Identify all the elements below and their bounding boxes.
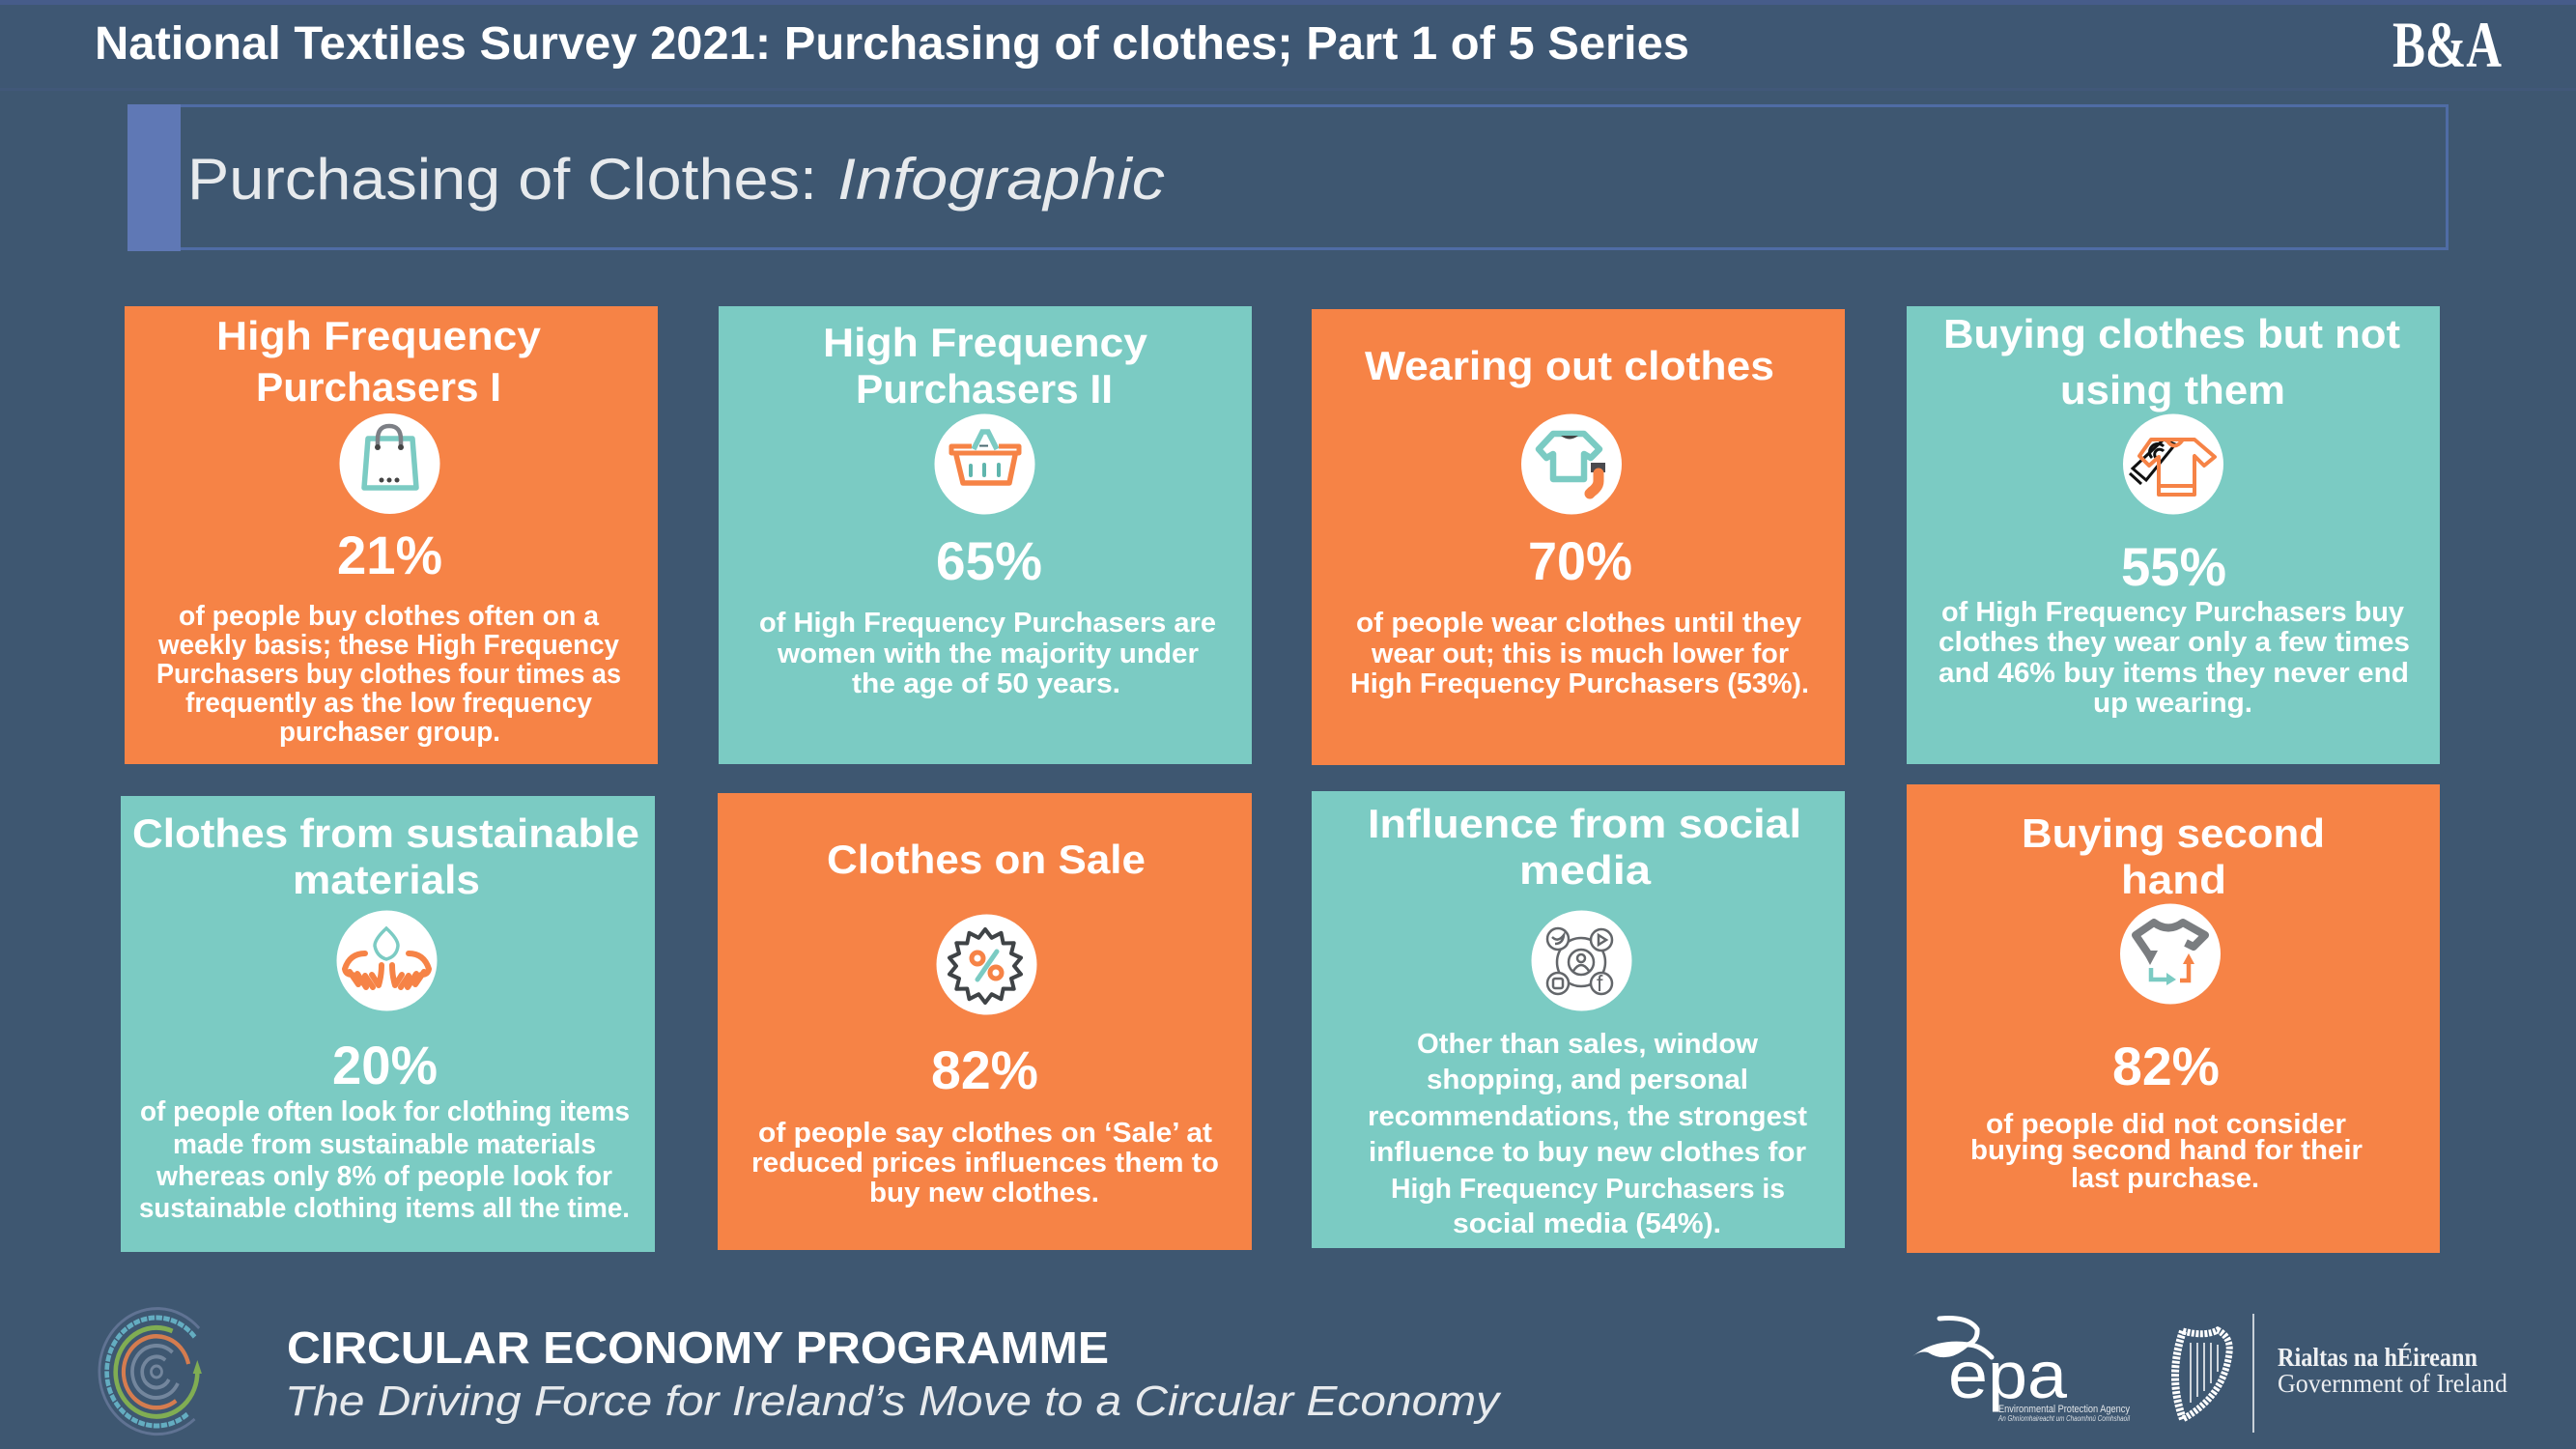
panel: Wearing out clothes	[1312, 309, 1845, 765]
body text: buying second hand for their	[1970, 1135, 2363, 1166]
body text: frequently as the low frequency	[185, 688, 592, 719]
body text: of people wear clothes until they	[1356, 608, 1801, 639]
logo: B&A: B&A	[2392, 8, 2502, 81]
body text: of people say clothes on ‘Sale’ at	[758, 1118, 1212, 1149]
icon: social media network	[1532, 910, 1632, 1010]
panel: High Frequency Purchasers I	[125, 306, 658, 764]
body text	[1970, 1109, 2363, 1194]
icon: t-shirt and sock	[1521, 413, 1622, 514]
panel: Buying second hand	[1907, 784, 2440, 1253]
body text: up wearing.	[2093, 688, 2252, 719]
panel: Influence from social media: Influence from social	[1368, 801, 1801, 846]
panel: Clothes on Sale: Clothes on Sale	[827, 837, 1146, 882]
panel: High Frequency Purchasers I: High Frequency	[216, 313, 542, 358]
body text: and 46% buy items they never end	[1939, 658, 2409, 689]
panel: Influence from social media	[1312, 791, 1845, 1248]
logo: Government of Ireland: Rialtas na hÉireann	[2278, 1343, 2477, 1372]
body text	[1368, 1029, 1807, 1239]
icon: social media network: f	[1597, 971, 1603, 996]
panel: Clothes from sustainable materials: Clothes from sustainable	[132, 810, 639, 856]
body text: last purchase.	[2071, 1163, 2259, 1194]
logo: circular economy rings	[99, 1309, 202, 1435]
panel: Buying clothes but not using them: using them	[2060, 367, 2285, 412]
body text: High Frequency Purchasers is	[1391, 1174, 1785, 1205]
body text: of people did not consider	[1986, 1109, 2346, 1140]
logo: EPA: An Ghníomhaireacht um Chaomhnú Comhshaoil	[1997, 1414, 2130, 1423]
body text: of High Frequency Purchasers buy	[1941, 597, 2404, 628]
panel: High Frequency Purchasers II: High Frequency	[823, 320, 1148, 365]
icon: shopping bag	[340, 413, 440, 514]
section title box	[127, 104, 2448, 251]
body text: Other than sales, window	[1417, 1029, 1758, 1060]
panel: Buying second hand: 82%	[2112, 1036, 2220, 1096]
body text: shopping, and personal	[1427, 1065, 1748, 1095]
panel: Buying second hand: hand	[2121, 857, 2226, 902]
panel: Buying clothes but not using them	[1907, 306, 2440, 764]
section title box: Purchasing of Clothes:	[187, 147, 817, 212]
panel: Wearing out clothes: 70%	[1528, 530, 1632, 591]
body text: of people buy clothes often on a	[179, 601, 600, 632]
panel: Clothes on Sale	[718, 793, 1252, 1250]
body text: whereas only 8% of people look for	[156, 1161, 612, 1192]
panel: Clothes from sustainable materials	[121, 796, 655, 1252]
body text: purchaser group.	[279, 717, 500, 748]
logo: EPA: epa	[1948, 1338, 2068, 1412]
body text	[759, 608, 1216, 699]
section title box: Infographic	[837, 147, 1165, 212]
body text: clothes they wear only a few times	[1939, 627, 2410, 658]
logo: EPA	[1912, 1318, 2130, 1423]
panel: Influence from social media: media	[1519, 847, 1652, 893]
body text: wear out; this is much lower for	[1371, 639, 1789, 669]
icon: percent badge	[937, 914, 1037, 1014]
body text: recommendations, the strongest	[1368, 1101, 1807, 1132]
panel: Clothes from sustainable materials: 20%	[332, 1035, 438, 1095]
panel: Clothes from sustainable materials: materials	[293, 857, 480, 902]
panel: High Frequency Purchasers I: 21%	[337, 525, 442, 585]
panel: Buying second hand: Buying second	[2022, 810, 2325, 856]
body text: buy new clothes.	[869, 1178, 1099, 1208]
panel: Clothes on Sale: 82%	[931, 1039, 1038, 1100]
panel: High Frequency Purchasers II	[719, 306, 1252, 764]
panel: High Frequency Purchasers II: Purchasers II	[856, 366, 1113, 412]
body text	[751, 1118, 1219, 1208]
icon: second-hand shirt with arrows	[2120, 904, 2221, 1005]
body text	[139, 1096, 630, 1224]
logo: Government of Ireland	[2278, 1343, 2507, 1398]
panel: Wearing out clothes: Wearing out clothes	[1365, 343, 1774, 388]
icon: hands holding a drop	[336, 910, 437, 1010]
body text: social media (54%).	[1453, 1208, 1721, 1239]
panel: Buying clothes but not using them: 55%	[2121, 536, 2226, 597]
body text: the age of 50 years.	[852, 668, 1120, 699]
body text: sustainable clothing items all the time.	[139, 1193, 630, 1224]
footer tagline: The Driving Force for Ireland’s Move to a Circular Economy	[285, 1378, 1502, 1425]
icon: shopping basket	[935, 413, 1035, 514]
body text	[1939, 597, 2410, 719]
body text: weekly basis; these High Frequency	[157, 630, 619, 661]
panel: Buying clothes but not using them: Buying clothes but not	[1943, 311, 2400, 356]
body text: High Frequency Purchasers (53%).	[1350, 668, 1809, 699]
header band	[0, 0, 2576, 91]
body text: women with the majority under	[777, 639, 1199, 669]
body text	[1350, 608, 1809, 699]
body text: of people often look for clothing items	[140, 1096, 630, 1127]
logo: EPA: Environmental Protection Agency	[1998, 1404, 2130, 1415]
body text: reduced prices influences them to	[751, 1148, 1219, 1179]
header band: National Textiles Survey 2021: Purchasing of clothes; Part 1 of 5 Series	[95, 18, 1689, 70]
panel: High Frequency Purchasers II: 65%	[936, 530, 1042, 591]
body text: Purchasers buy clothes four times as	[156, 659, 621, 690]
footer programme title: CIRCULAR ECONOMY PROGRAMME	[287, 1322, 1109, 1373]
divider line	[2252, 1314, 2254, 1433]
logo: Government of Ireland: Government of Ireland	[2278, 1369, 2507, 1398]
body text	[156, 601, 621, 748]
icon: harp	[2175, 1330, 2229, 1419]
icon: shirt and price tag	[2123, 413, 2223, 514]
body text: made from sustainable materials	[173, 1129, 596, 1160]
panel: High Frequency Purchasers I: Purchasers I	[256, 364, 501, 410]
body text: influence to buy new clothes for	[1369, 1137, 1806, 1168]
body text: of High Frequency Purchasers are	[759, 608, 1216, 639]
